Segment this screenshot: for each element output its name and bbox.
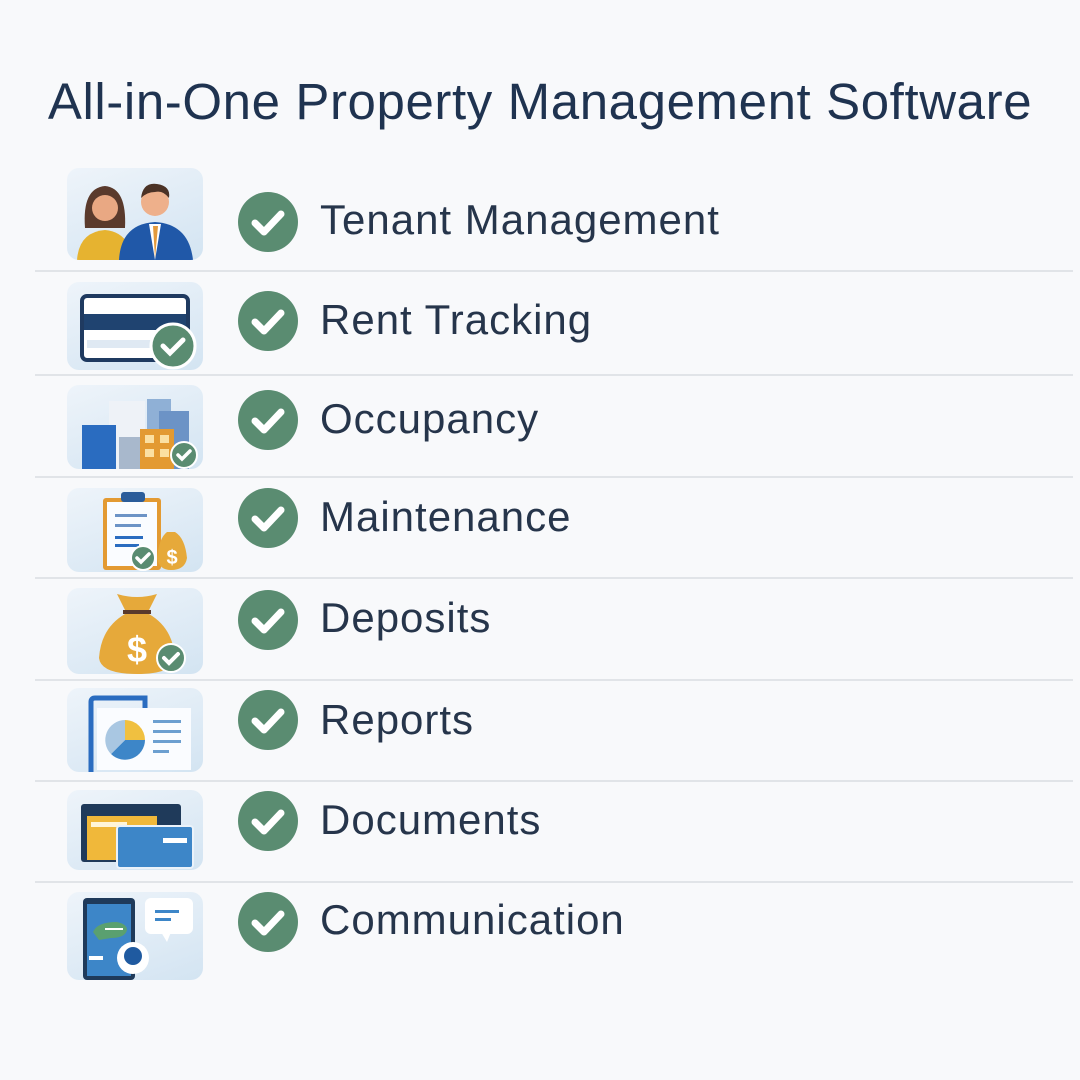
row: tenant management bbox=[67, 168, 720, 260]
row: communication bbox=[67, 892, 625, 980]
row: documents bbox=[67, 790, 541, 870]
icon: money bag: $ bbox=[127, 629, 147, 670]
check icon bbox=[238, 892, 298, 952]
label: Documents bbox=[320, 796, 541, 843]
label: Maintenance bbox=[320, 493, 572, 540]
icon: clipboard bbox=[67, 488, 203, 572]
label: Occupancy bbox=[320, 395, 539, 442]
check icon bbox=[238, 488, 298, 548]
icon: folders bbox=[67, 790, 203, 870]
check icon bbox=[238, 390, 298, 450]
check icon bbox=[238, 690, 298, 750]
icon: money bag bbox=[67, 588, 203, 674]
label: Rent Tracking bbox=[320, 296, 592, 343]
icon: clipboard: $ bbox=[166, 547, 178, 569]
icon: tenants bbox=[67, 168, 203, 260]
icon: phone chat bbox=[67, 892, 203, 980]
row: occupancy bbox=[67, 385, 539, 469]
label: Reports bbox=[320, 696, 474, 743]
check icon bbox=[238, 590, 298, 650]
row: maintenance bbox=[67, 488, 572, 572]
label: Tenant Management bbox=[320, 196, 720, 243]
label: Communication bbox=[320, 896, 625, 943]
row: deposits bbox=[67, 588, 491, 674]
check icon bbox=[238, 791, 298, 851]
row: reports bbox=[67, 688, 474, 772]
check icon bbox=[238, 192, 298, 252]
icon: card bbox=[67, 282, 203, 370]
row: rent tracking bbox=[67, 282, 592, 370]
label: Deposits bbox=[320, 594, 491, 641]
icon: buildings bbox=[67, 385, 203, 469]
check icon bbox=[238, 291, 298, 351]
title: All-in-One Property Management Software bbox=[48, 73, 1032, 130]
icon: report bbox=[67, 688, 203, 772]
